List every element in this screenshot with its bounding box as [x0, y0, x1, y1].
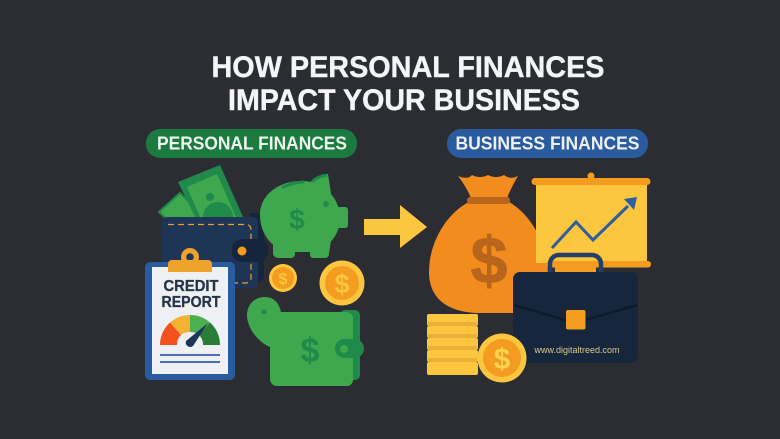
- credit report label: [162, 278, 221, 311]
- icon: big gold coin: $: [494, 343, 511, 376]
- icon: piggy bank: [260, 174, 348, 258]
- icon: green wallet: $: [301, 332, 320, 370]
- website url: www.digitaltreed.com: [534, 345, 620, 355]
- title: [212, 51, 604, 117]
- heading: personal finances: PERSONAL FINANCES: [157, 132, 347, 154]
- icon: briefcase: [513, 255, 638, 363]
- credit report label: CREDIT: [164, 278, 219, 295]
- heading: business finances: [447, 129, 648, 158]
- icon: presentation board with rising chart: [532, 172, 651, 268]
- icon: big gold coin: [478, 334, 526, 382]
- icon: piggy bank: $: [289, 204, 305, 235]
- heading: personal finances: [146, 129, 357, 158]
- title: HOW PERSONAL FINANCES: [212, 51, 604, 84]
- icon: money bag: [429, 175, 548, 313]
- title: IMPACT YOUR BUSINESS: [228, 84, 580, 117]
- icon: large coin: [320, 260, 364, 306]
- clipboard clip: [168, 248, 212, 272]
- icon: wallet with cash: [159, 165, 268, 288]
- icon: money bag: $: [471, 223, 507, 297]
- icon: coin stack: [427, 314, 478, 375]
- icon: small coin: [269, 264, 297, 292]
- icon: green wallet: [247, 297, 364, 386]
- credit report label: REPORT: [162, 294, 221, 311]
- icon: credit report clipboard: [145, 248, 235, 380]
- arrow: [364, 205, 427, 248]
- icon: small coin: $: [279, 271, 288, 288]
- heading: business finances: BUSINESS FINANCES: [456, 132, 640, 154]
- credit score gauge: [160, 315, 220, 347]
- icon: large coin: $: [334, 269, 350, 299]
